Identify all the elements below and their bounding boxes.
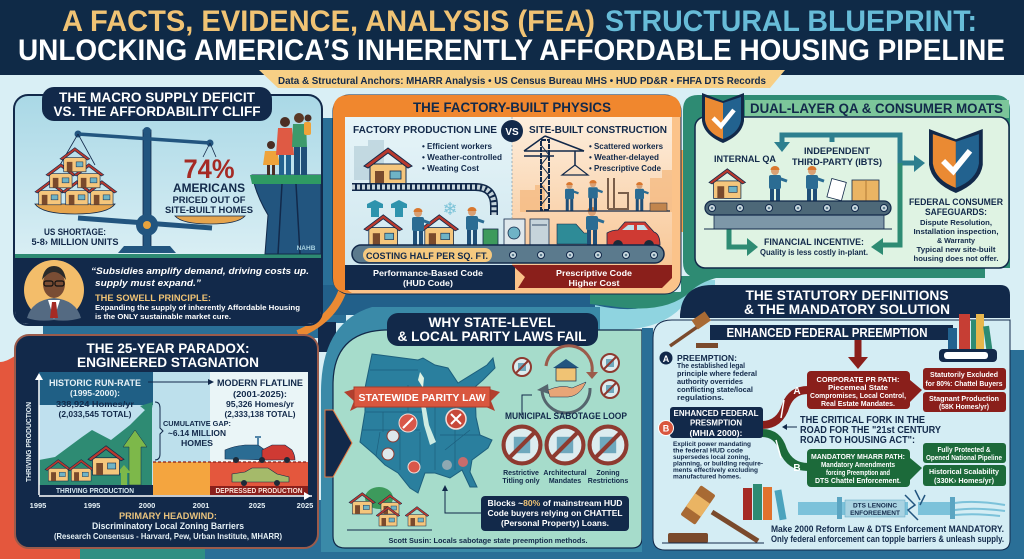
Sowell quote: supply must expand.” [95, 278, 201, 289]
historic run-rate labels: 338,924 Homes/yr [56, 399, 135, 409]
y-axis label: THRIVING PRODUCTION [26, 402, 33, 482]
icon: neighborhood houses [347, 487, 432, 530]
panel title pill [42, 87, 272, 121]
site-built heading: SITE-BUILT CONSTRUCTION [529, 124, 667, 136]
icon: family on the cliff [263, 113, 312, 175]
shortage label: US SHORTAGE: [44, 227, 106, 237]
enhanced preemption body: the federal HUD code [673, 448, 743, 454]
Sowell quote: THE SOWELL PRINCIPLE: [95, 293, 211, 304]
performance-based code caption: (HUD Code) [403, 278, 453, 288]
VS badge [501, 120, 523, 142]
prescriptive code caption: Prescriptive Code [556, 268, 632, 278]
US map [360, 354, 495, 493]
site-built bullets: • Weather-delayed [589, 153, 659, 162]
prohibited icons with labels: Mandates [549, 478, 581, 485]
icon: broken pipeline with enforcement label [798, 490, 1005, 520]
factory line illustration: ❄ [442, 199, 458, 219]
icon: house pile on pan [35, 148, 117, 214]
callout arrow [442, 485, 481, 513]
cars icon [225, 437, 295, 486]
mandate conclusion [771, 524, 1004, 544]
enhanced preemption body: planning, or building require- [673, 460, 763, 468]
panel heading: THE 25-YEAR PARADOX: [86, 341, 250, 356]
panel: factory-built physics [333, 95, 703, 294]
title line 1 blue part: STRUCTURAL BLUEPRINT: [605, 5, 977, 38]
panel heading: DUAL-LAYER QA & CONSUMER MOATS [750, 101, 1003, 116]
panel title pill: VS. THE AFFORDABILITY CLIFF [54, 104, 260, 119]
modern flatline labels [217, 378, 303, 419]
chattel callout: Blocks ~80% of mainstream HUD [488, 498, 622, 508]
panel: dual-layer QA and consumer moats [683, 93, 1010, 278]
cumulative gap brace [155, 402, 163, 460]
enhanced preemption body: ments effectively excluding [673, 467, 758, 474]
third party label: INDEPENDENT [804, 146, 871, 156]
stat: 74 percent priced out [165, 154, 253, 216]
cumulative gap label: ~6.14 MILLION [168, 428, 226, 438]
icon: small shield [702, 93, 744, 143]
enhanced preemption body: supersedes local zoning, [673, 454, 750, 461]
historic run-rate labels [49, 378, 141, 419]
factory production line heading: FACTORY PRODUCTION LINE [353, 124, 497, 136]
preemption definition: principle where federal [677, 371, 757, 378]
icon: books top [939, 314, 997, 362]
federal consumer safeguards: Typical new site-built [916, 245, 996, 254]
factory bullets: • Efficient workers [422, 142, 493, 151]
primary headwind: PRIMARY HEADWIND: [119, 511, 217, 522]
fork paths [762, 390, 808, 467]
production chart: DEPRESSED PRODUCTION [216, 488, 302, 495]
QA loop arrows [729, 135, 916, 247]
chattel callout: Code buyers relying on CHATTEL [488, 508, 622, 518]
panel header [680, 285, 1010, 318]
icon: broken pipeline with enforcement label: DTS LENOINC [853, 502, 897, 510]
corporate PR path: A [793, 386, 801, 397]
panel heading: THE FACTORY-BUILT PHYSICS [413, 99, 611, 115]
icon: cliff: NAHB [297, 245, 316, 252]
prohibited icons with labels: Titling only [502, 478, 540, 485]
modern flatline labels: (2001-2025): [233, 389, 287, 399]
corporate PR path: Real Estate Mandates. [821, 399, 895, 408]
panel header: & THE MANDATORY SOLUTION [744, 301, 950, 317]
icon: portrait [24, 260, 84, 321]
data sources banner: Data & Structural Anchors: MHARR Analysis • US Census Bureau MHS • HUD PD&R • FHFA DTS Records [278, 75, 766, 87]
production chart: THRIVING PRODUCTION [56, 488, 134, 495]
primary headwind [54, 511, 282, 541]
modern flatline labels: (2,333,138 TOTAL) [224, 409, 296, 419]
panel title pill: WHY STATE-LEVEL [428, 314, 556, 330]
shortage label: 5-8› MILLION UNITS [32, 237, 118, 247]
corporate path outcomes: Statutorily Excluded [930, 372, 998, 379]
stat: 74 percent priced out: PRICED OUT OF [172, 195, 246, 206]
corporate path outcomes: for 80%: Chattel Buyers [926, 381, 1003, 388]
mandatory MHARR path: DTS Chattel Enforcement. [815, 476, 901, 485]
critical fork text: THE CRITICAL FORK IN THE [800, 414, 925, 426]
x-axis labels: 1995 [84, 501, 100, 510]
mandatory path outcomes: (330K› Homes/yr) [934, 478, 994, 485]
conveyor with cost label [352, 245, 664, 263]
production chart [26, 372, 313, 510]
modern flatline labels: MODERN FLATLINE [217, 378, 303, 389]
stat: 74 percent priced out: AMERICANS [173, 183, 245, 195]
panel title pill: & LOCAL PARITY LAWS FAIL [398, 328, 587, 344]
federal consumer safeguards: Dispute Resolution, [920, 218, 992, 227]
x-axis labels: 2001 [193, 501, 209, 510]
panel: statutory definitions [653, 285, 1010, 550]
stat: 74 percent priced out: SITE-BUILT HOMES [165, 205, 253, 216]
cumulative gap label [163, 419, 231, 448]
prohibited icons with labels [502, 427, 628, 485]
Sowell quote: Expanding the supply of inherently Affordable Housing [95, 303, 300, 312]
enhanced preemption body: Explicit power mandating [673, 441, 751, 448]
corporate PR path: Compromises, Local Control, [810, 391, 906, 400]
x-axis labels: 2025 [249, 501, 265, 510]
icon: gavel bottom [662, 485, 764, 543]
performance-based code caption [373, 268, 483, 288]
panel: macro supply deficit [14, 87, 322, 325]
federal consumer safeguards: SAFEGUARDS: [925, 207, 987, 217]
crane and site workers [524, 136, 670, 211]
corporate PR path: CORPORATE PR PATH: [816, 375, 900, 384]
icon: gavel top [670, 311, 718, 348]
cumulative gap label: HOMES [181, 438, 213, 448]
preemption definition: conflicting state/local [677, 387, 753, 394]
corporate PR path [793, 371, 922, 409]
prescriptive code caption [556, 268, 632, 288]
chattel callout: (Personal Property) Loans. [501, 518, 609, 528]
enhanced preemption body [673, 441, 763, 480]
modern flatline labels: 95,326 Homes/yr [226, 399, 295, 409]
site-built bullets: • Prescriptive Code [589, 164, 662, 173]
enhanced federal preemption bar: ENHANCED FEDERAL PREEMPTION [726, 325, 928, 340]
site-built bullets: • Scattered workers [589, 142, 664, 151]
financial incentive [760, 237, 868, 257]
panel: 25-year paradox [15, 335, 318, 548]
x-axis labels: 1995 [30, 501, 46, 510]
panel heading [77, 341, 259, 370]
enhanced preemption box: ENHANCED FEDERAL [674, 408, 758, 418]
panel title pill [387, 313, 598, 346]
prohibited icons with labels: Architectural [543, 470, 587, 477]
mandatory path outcomes: Historical Scalability [929, 469, 999, 476]
financial incentive: FINANCIAL INCENTIVE: [764, 237, 864, 247]
enhanced preemption box: (MHIA 2000): [690, 428, 743, 438]
enhanced preemption box [658, 407, 763, 438]
VS badge: VS [505, 127, 519, 138]
preemption definition: The established legal [677, 363, 745, 370]
ribbon: statewide parity law: STATEWIDE PARITY LAW [358, 392, 486, 404]
conveyor with cost label: COSTING HALF PER SQ. FT. [366, 251, 488, 262]
mandatory path outcomes: Fully Protected & [938, 447, 990, 454]
performance-based code caption: Performance-Based Code [373, 268, 483, 278]
skyline backgrounds [354, 140, 672, 212]
icon: broken pipeline with enforcement label: ENFOREEMENT [850, 510, 900, 517]
mandatory MHARR path: B [793, 463, 801, 474]
primary headwind: Discriminatory Local Zoning Barriers [92, 521, 244, 531]
mandatory path outcomes: Opened National Pipeline [926, 455, 1002, 462]
federal consumer safeguards: FEDERAL CONSUMER [909, 197, 1003, 207]
footer note: Scott Susin: Locals sabotage state preemption methods. [388, 536, 588, 545]
federal consumer safeguards: Installation inspection, [914, 227, 998, 236]
factory bullets: • Weather-controlled [422, 153, 502, 162]
arrowheads [747, 142, 925, 256]
arrow to QA panel [676, 150, 703, 232]
preemption definition [660, 352, 757, 402]
preemption definition: regulations. [677, 395, 724, 402]
municipal sabotage label: MUNICIPAL SABOTAGE LOOP [505, 411, 628, 422]
historic run-rate labels: (1995-2000): [70, 388, 120, 398]
fork direction arrows [776, 400, 784, 458]
third party label: THIRD-PARTY (IBTS) [792, 157, 882, 167]
data sources banner [259, 70, 785, 88]
prescriptive code caption: Higher Cost [568, 278, 620, 288]
balance scale [60, 127, 245, 253]
corporate path outcomes: Stagnant Production [929, 396, 999, 403]
corporate path outcomes [923, 368, 1006, 412]
corporate path outcomes: (58K Homes/yr) [939, 404, 989, 411]
mandatory path outcomes [923, 443, 1006, 486]
x-axis labels: 2025 [297, 501, 313, 510]
mandatory MHARR path: Mandatory Amendments [821, 460, 895, 469]
x-axis labels [30, 501, 313, 510]
factory bullets: • Weating Cost [422, 164, 479, 173]
prohibited icons with labels: Zoning [596, 470, 620, 477]
down arrow [848, 340, 868, 369]
enhanced preemption box: B [663, 424, 670, 434]
Sowell quote: is the ONLY sustainable market cure. [95, 312, 231, 321]
icon: municipal sabotage loop [513, 346, 619, 415]
stat: 74 percent priced out: 74% [184, 154, 234, 184]
critical fork text: ROAD FOR THE "21st CENTURY [800, 424, 941, 436]
corporate PR path: Piecemeal State [828, 383, 888, 392]
header band with title [0, 0, 1024, 75]
third party label [792, 146, 882, 167]
prohibited icons with labels: Restrictions [588, 478, 628, 485]
preemption definition: PREEMPTION: [677, 353, 737, 363]
panel title pill: THE MACRO SUPPLY DEFICIT [59, 90, 256, 105]
mandatory MHARR path [793, 449, 922, 487]
Sowell quote [91, 266, 309, 321]
factory bullets [422, 142, 502, 173]
panel: state-level parity laws [321, 307, 653, 559]
panel heading: ENGINEERED STAGNATION [77, 355, 259, 370]
federal consumer safeguards: housing does not offer. [914, 254, 998, 263]
historic to modern arrow [148, 379, 214, 385]
internal QA label: INTERNAL QA [714, 154, 776, 164]
site-built bullets [589, 142, 664, 173]
enhanced preemption body: manufactured homes. [673, 474, 741, 480]
cumulative gap label: CUMULATIVE GAP: [163, 419, 231, 428]
historic run-rate labels: HISTORIC RUN-RATE [49, 378, 141, 389]
title line 1 gold part: A FACTS, EVIDENCE, ANALYSIS (FEA) [62, 5, 595, 38]
chattel callout [481, 496, 629, 531]
shortage label [32, 227, 118, 247]
preemption definition: authority overrides [677, 379, 743, 386]
preemption definition: A [663, 354, 670, 364]
enhanced preemption box: PRESMPTION [690, 418, 742, 428]
prohibited icons with labels: Restrictive [503, 470, 539, 477]
financial incentive: Quality is less costly in-plant. [760, 248, 868, 257]
mandatory MHARR path: MANDATORY MHARR PATH: [811, 452, 905, 461]
historic run-rate labels: (2,033,545 TOTAL) [58, 409, 132, 419]
factory line illustration [352, 148, 660, 250]
icon: cliff [250, 175, 321, 254]
federal consumer safeguards: & Warranty [937, 236, 976, 245]
primary headwind: (Research Consensus - Harvard, Pew, Urban Institute, MHARR) [54, 532, 282, 541]
panel header: THE STATUTORY DEFINITIONS [746, 287, 948, 303]
chevron arrow from left [325, 410, 352, 477]
critical fork text: ROAD TO HOUSING ACT": [800, 434, 915, 446]
mandate conclusion: Make 2000 Reform Law & DTS Enforcement MANDATORY. [771, 524, 1004, 534]
Sowell quote: “Subsidies amplify demand, driving costs up. [91, 266, 309, 277]
mandatory MHARR path: forcing Preemption and [826, 468, 890, 477]
icon: books bottom [743, 484, 787, 520]
federal consumer safeguards [909, 197, 1003, 263]
critical fork text [782, 414, 941, 446]
conveyor with inspectors [704, 166, 892, 229]
icon: large shield [929, 129, 983, 193]
ribbon: statewide parity law [344, 387, 500, 411]
x-axis labels: 2000 [139, 501, 155, 510]
